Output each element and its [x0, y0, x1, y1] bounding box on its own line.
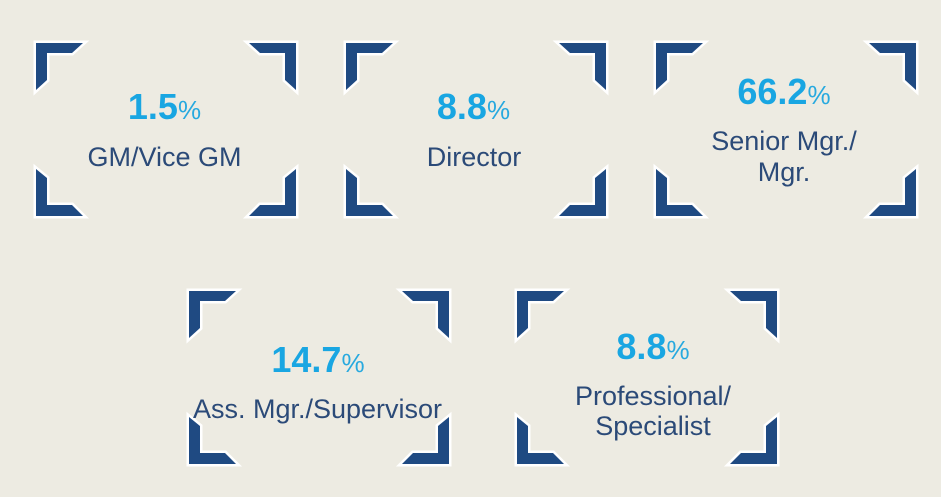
label: Director: Director	[427, 142, 521, 172]
panel: Professional/Specialist	[517, 291, 777, 464]
icon: frame brackets	[517, 291, 777, 464]
label: Professional/Specialist: Specialist	[595, 411, 711, 441]
stat: 8.8%: 8.8%	[616, 326, 690, 367]
stat: 8.8%: 8.8%	[437, 86, 510, 127]
label: Ass. Mgr./Supervisor: Ass. Mgr./Supervisor	[193, 394, 442, 424]
icon: frame brackets	[36, 43, 296, 216]
label: Senior Mgr./Mgr.: Mgr.	[758, 157, 810, 187]
icon: frame brackets	[656, 43, 916, 216]
stat: 66.2%: 66.2%	[737, 71, 831, 112]
label: Professional/Specialist: Professional/	[575, 381, 732, 411]
panel: Senior Mgr./Mgr.	[656, 43, 916, 216]
label: Senior Mgr./Mgr.: Senior Mgr./	[711, 126, 857, 156]
panel: Director	[346, 43, 606, 216]
panel: Ass. Mgr./Supervisor	[189, 291, 449, 464]
panel: GM/Vice GM	[36, 43, 296, 216]
label: GM/Vice GM: GM/Vice GM	[87, 142, 242, 172]
stat: 14.7%: 14.7%	[271, 339, 365, 380]
icon: frame brackets	[189, 291, 449, 464]
icon: frame brackets	[346, 43, 606, 216]
stat: 1.5%: 1.5%	[128, 86, 201, 127]
